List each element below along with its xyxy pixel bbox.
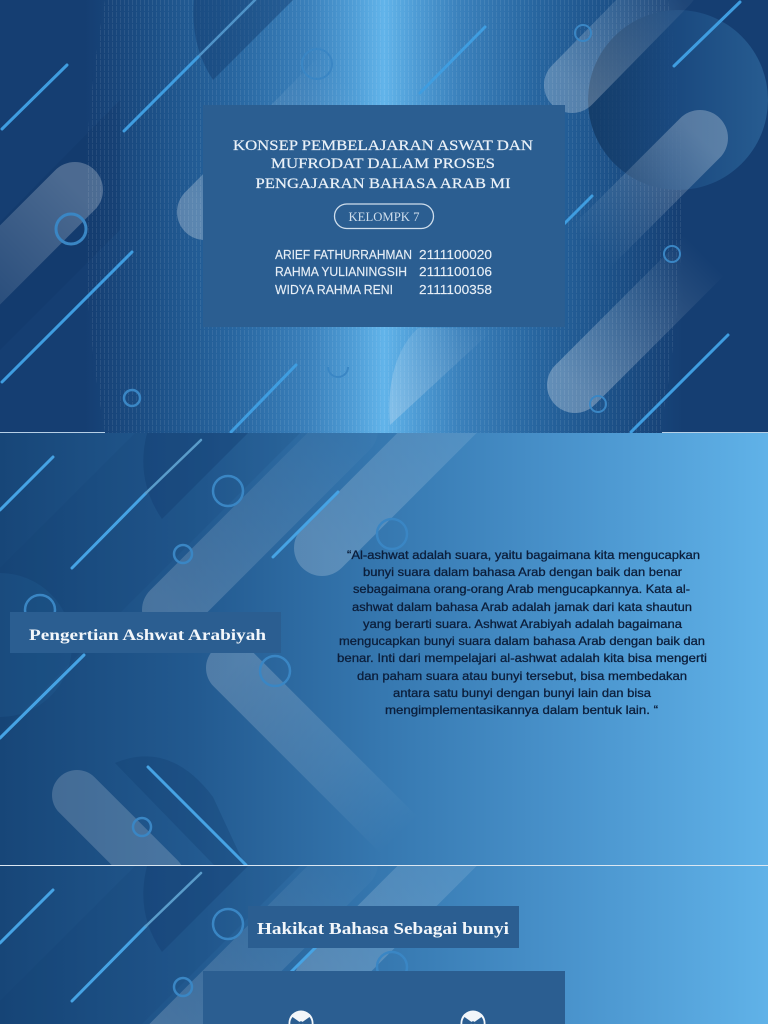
- cover title: [233, 138, 533, 192]
- heading: Hakikat Bahasa Sebagai bunyi: [248, 906, 519, 948]
- slide 1: cover: [0, 0, 768, 433]
- ring outlines: [174, 909, 407, 996]
- group badge: [334, 204, 434, 228]
- dark circle top right: [588, 10, 768, 190]
- definition quote text: [337, 548, 707, 717]
- dark wedge bottom: [128, 756, 244, 865]
- cover background: [112, 0, 657, 433]
- cover panel: [203, 105, 565, 327]
- diagonal light lines: [2, 0, 740, 432]
- small ring outlines: [56, 25, 680, 412]
- icon: radiation left: [288, 1010, 314, 1024]
- heading: Hakikat Bahasa Sebagai bunyi: Hakikat Bahasa Sebagai bunyi: [257, 919, 509, 938]
- definition quote text: ashwat dalam bahasa Arab adalah jamak dari kata shautun: [352, 600, 692, 614]
- pill centre: [205, 75, 340, 212]
- dark wedge top: [193, 0, 293, 80]
- definition quote text: bunyi suara dalam bahasa Arab dengan baik dan benar: [363, 565, 682, 579]
- slide 2 background: [0, 433, 768, 865]
- definition quote text: mengucapkan bunyi suara dalam bahasa Arab dengan baik dan: [339, 634, 705, 648]
- definition quote text: dan paham suara atau bunyi tersebut, bisa membedakan: [357, 669, 687, 683]
- definition quote text: mengimplementasikannya dalam bentuk lain. “: [385, 703, 658, 717]
- wedge bottom: [389, 328, 475, 425]
- slide 3 background: [0, 866, 768, 1024]
- slide divider: [0, 865, 768, 866]
- diagonal light lines: [0, 440, 338, 865]
- content panel: [203, 971, 565, 1024]
- pill lower long: [206, 653, 389, 826]
- slide 3: Hakikat Bahasa: [0, 866, 768, 1024]
- definition quote text: “Al-ashwat adalah suara, yaitu bagaimana kita mengucapkan: [347, 548, 700, 562]
- ring outlines: [25, 476, 407, 836]
- pill upper right: [296, 866, 476, 971]
- pill top right: [572, 0, 670, 85]
- icon: radiation right: [460, 1010, 486, 1024]
- definition quote text: yang berarti suara. Ashwat Arabiyah adalah bagaimana: [363, 617, 682, 631]
- cover title: PENGAJARAN BAHASA ARAB MI: [256, 176, 511, 192]
- pill lower left: [77, 795, 160, 878]
- cover title: MUFRODAT DALAM PROSES: [271, 156, 495, 172]
- pill right: [590, 138, 700, 248]
- pill centre: [170, 430, 350, 610]
- dark wedge top: [143, 433, 248, 519]
- diagonal dark band: [0, 866, 300, 1024]
- member list: WIDYA RAHMA RENI: [275, 283, 393, 297]
- pill bottom right: [575, 255, 705, 385]
- member list: 2111100358: [419, 283, 492, 297]
- diagonal light lines: [0, 873, 338, 1001]
- circle left: [0, 573, 72, 717]
- dark diagonal band: [0, 100, 120, 350]
- member list: RAHMA YULIANINGSIH: [275, 265, 407, 279]
- cover bottom edge highlights: [0, 432, 768, 433]
- definition quote text: benar. Inti dari mempelajari al-ashwat adalah kita bisa mengerti: [337, 651, 707, 665]
- member list: ARIEF FATHURRAHMAN: [275, 248, 412, 262]
- heading: Pengertian Ashwat Arabiyah: [10, 612, 281, 653]
- pill left: [0, 190, 75, 325]
- pill upper right: [322, 390, 480, 548]
- slide 2: definition: [0, 433, 768, 865]
- cover title: KONSEP PEMBELAJARAN ASWAT DAN: [233, 138, 533, 154]
- pill centre: [170, 863, 350, 1024]
- group badge: KELOMPK 7: [348, 210, 420, 224]
- dark wedge top: [143, 866, 248, 952]
- member list: 2111100106: [419, 265, 492, 279]
- member list: [275, 248, 492, 297]
- heading: Pengertian Ashwat Arabiyah: Pengertian Ashwat Arabiyah: [29, 627, 266, 644]
- fine line pattern: [85, 0, 682, 433]
- definition quote text: antara satu bunyi dengan bunyi lain dan bisa: [393, 686, 651, 700]
- diagonal dark band: [0, 433, 300, 733]
- definition quote text: sebagaimana orang-orang Arab mengucapkannya. Kata al-: [353, 582, 690, 596]
- member list: 2111100020: [419, 248, 492, 262]
